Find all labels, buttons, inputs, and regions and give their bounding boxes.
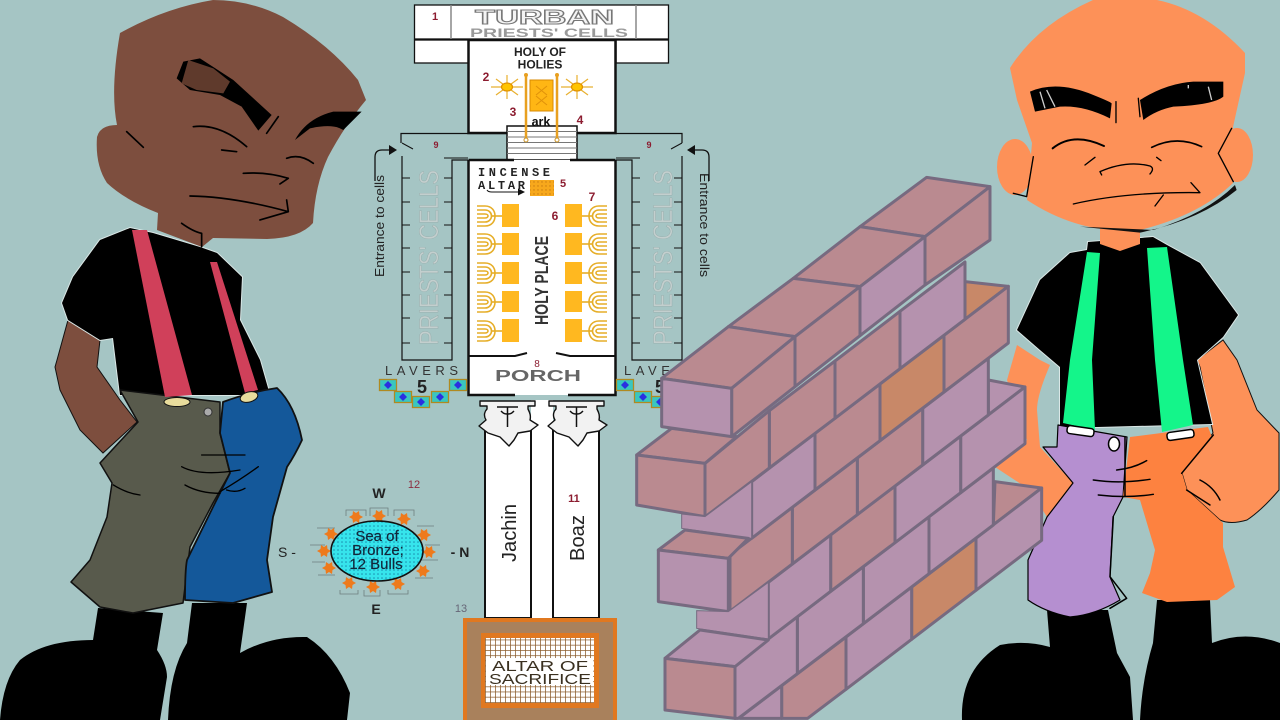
bull enclosure brackets (310, 508, 440, 596)
label: 12: 12 (408, 479, 420, 491)
icon: capital left (479, 401, 538, 446)
arrow: right entrance (687, 145, 709, 181)
label: east: E (371, 601, 381, 617)
icon: lavers right (616, 380, 668, 408)
label: priests' cells right: PRIESTS' CELLS (648, 170, 678, 345)
purple trouser leg (1028, 425, 1127, 617)
tables left (502, 204, 519, 342)
label: lavers right: LAVERS (624, 363, 697, 378)
right eyebrow (295, 112, 362, 140)
panel: holy place (468, 160, 616, 395)
t-shirt (62, 228, 270, 395)
row 5 bricks (768, 380, 1025, 639)
label: jachin: Jachin (499, 504, 521, 562)
icon: capital right (548, 401, 607, 446)
button (1108, 437, 1120, 451)
trouser creases (113, 455, 258, 495)
right leg and shoe (1140, 600, 1280, 720)
suspender clips (1067, 425, 1194, 441)
label: incense altar: INCENSE (478, 166, 550, 180)
face features (1013, 82, 1237, 233)
arm (55, 320, 137, 453)
label: lavers left: LAVERS (385, 363, 458, 378)
ears (997, 128, 1253, 195)
label: sea of bronze: Bronze; (352, 542, 404, 559)
temple floor plan diagram (278, 5, 712, 720)
left leg and shoe (962, 610, 1133, 720)
neck (1100, 228, 1140, 251)
label: 13: 13 (455, 603, 467, 615)
label: entrance to cells right: Entrance to cells (697, 173, 712, 278)
label: 7: 7 (589, 190, 596, 204)
label: laver 5 right: 5 (655, 377, 665, 397)
row 4 bricks (730, 358, 988, 611)
eye and mouth lines (127, 117, 313, 247)
panel: holy of holies (468, 40, 616, 133)
olive trouser leg (71, 390, 230, 613)
label: sea of bronze: Sea of (355, 528, 400, 545)
label: entrance to cells left: Entrance to cells (372, 174, 387, 277)
icon: ark of the covenant (524, 73, 559, 142)
row 6 end brick (665, 630, 768, 718)
row 4 end brick (658, 530, 748, 612)
panel: stairs (507, 126, 577, 160)
eye and mouth lines (1013, 98, 1233, 206)
label: altar of sacrifice: SACRIFICE (489, 671, 591, 688)
face features (127, 58, 362, 247)
label: 9 left: 9 (433, 140, 439, 150)
label: incense altar: ALTAR (478, 179, 526, 193)
red suspenders (132, 230, 258, 397)
label: north: - N (451, 544, 469, 560)
right eyebrow (1140, 82, 1223, 120)
label: 3: 3 (510, 105, 517, 119)
icon: cherub right (561, 75, 593, 99)
brick wall (637, 177, 1042, 718)
eyebrow highlights (1040, 85, 1212, 108)
label: 5: 5 (560, 178, 566, 190)
row 7 bricks (740, 482, 1042, 718)
row 3 end brick (682, 482, 752, 538)
left eyebrow (177, 58, 272, 131)
label: holy of holies: HOLIES (518, 58, 562, 72)
panel: turban priests' cells (414, 5, 668, 63)
figure: right orange character (962, 0, 1280, 720)
label: holy place: HOLY PLACE (532, 236, 552, 325)
row 2 bricks (705, 262, 965, 517)
icon: lavers left (380, 380, 466, 408)
label: altar of sacrifice: ALTAR OF (492, 658, 588, 675)
panel: priests' cells right wing (578, 134, 682, 360)
row 5 end brick (697, 582, 768, 639)
label: sea of bronze: 12 Bulls (349, 556, 403, 573)
tables right (565, 204, 582, 342)
menorahs right (582, 206, 607, 341)
head (1010, 0, 1245, 231)
pillars jachin and boaz (479, 400, 607, 618)
row 6 bricks (735, 468, 993, 718)
label: 6: 6 (552, 209, 559, 223)
top row bricks (662, 177, 990, 437)
label: 4: 4 (577, 113, 584, 127)
label: priests' cells left: PRIESTS' CELLS (414, 170, 444, 345)
label: south: S - (278, 544, 296, 560)
icon: incense altar (530, 180, 554, 196)
label: 1: 1 (432, 11, 438, 23)
menorahs left (477, 206, 502, 341)
right leg and shoe (168, 603, 350, 720)
label: 8: 8 (534, 359, 540, 370)
left eyebrow (1030, 87, 1112, 118)
label: holy of holies: HOLY OF (514, 45, 566, 59)
altar of sacrifice (463, 618, 617, 720)
head (97, 0, 366, 247)
label: 11: 11 (568, 493, 580, 505)
label: 9 right: 9 (646, 140, 652, 150)
panel: priests' cells left wing (401, 134, 506, 360)
arrow: left entrance (375, 145, 397, 181)
eyebrow patch (182, 60, 230, 93)
button (204, 408, 212, 416)
arrow: to incense altar (487, 188, 525, 196)
suspender clips (164, 390, 259, 406)
icon: cherub left (491, 75, 523, 99)
label: boaz: Boaz (567, 515, 589, 561)
bulls (317, 510, 436, 593)
trouser creases (1093, 435, 1220, 608)
label: ark: ark (532, 115, 550, 129)
row 3 bricks (752, 282, 1008, 538)
orange trouser leg (1123, 427, 1235, 602)
label: priests' cells: PRIESTS' CELLS (470, 26, 628, 40)
right arm and hand (1182, 340, 1279, 522)
green suspenders (1063, 247, 1193, 432)
label: porch: PORCH (495, 368, 581, 385)
jaw shadow (1080, 185, 1237, 233)
left arm and hand (995, 345, 1073, 517)
label: west: W (372, 485, 386, 501)
figure: left brown character (0, 0, 366, 720)
label: 2: 2 (483, 70, 490, 84)
row 2 end brick (637, 428, 737, 517)
label: turban: TURBAN (475, 7, 614, 29)
sea of bronze compass (278, 485, 469, 617)
left leg and shoe (0, 608, 167, 720)
t-shirt (1017, 237, 1238, 428)
label: laver 5 left: 5 (417, 377, 427, 397)
blue trouser leg (185, 388, 302, 603)
